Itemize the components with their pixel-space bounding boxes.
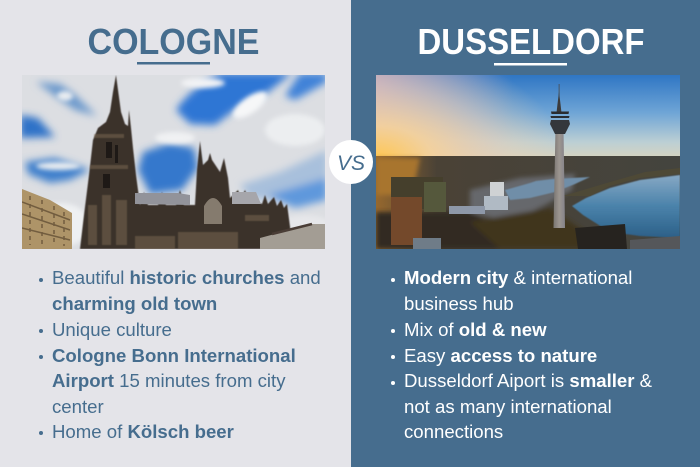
bullet list: dusseldorf: Mix of old & new (404, 319, 547, 340)
VS badge (329, 140, 373, 184)
panel: cologne (22, 28, 325, 249)
bullet list: dusseldorf: Modern city & international (404, 267, 632, 288)
bullet list: dusseldorf: Dusseldorf Aiport is smaller & (404, 370, 653, 391)
bullet list: cologne: Airport 15 minutes from city (52, 370, 286, 391)
bullet list: cologne (39, 267, 321, 442)
bullet list: cologne: Home of Kölsch beer (52, 421, 234, 442)
river (572, 175, 680, 238)
bullet list: dusseldorf: not as many international (404, 396, 612, 417)
buildings (391, 177, 443, 209)
bullet list: cologne: center (52, 396, 104, 417)
wall right (260, 224, 325, 249)
photo: dusseldorf rhine tower (376, 75, 680, 249)
bullet list: dusseldorf (391, 267, 653, 442)
tower (550, 84, 570, 228)
bullet list: cologne: Beautiful historic churches and (52, 267, 321, 288)
building left (22, 189, 72, 249)
VS badge: VS (337, 152, 365, 175)
peninsula (563, 168, 680, 196)
heading underline: cologne (137, 62, 210, 64)
bullet list: cologne: Cologne Bonn International (52, 345, 296, 366)
panel: dusseldorf (351, 0, 700, 467)
bullet list: cologne: charming old town (52, 293, 217, 314)
cathedral (80, 75, 291, 249)
bullet list: cologne: Unique culture (52, 319, 172, 340)
heading: dusseldorf: DUSSELDORF (418, 21, 644, 62)
photo: cologne cathedral (20, 73, 331, 249)
heading: cologne: COLOGNE (88, 21, 260, 62)
heading underline: dusseldorf (494, 63, 567, 66)
bullet list: dusseldorf: business hub (404, 293, 514, 314)
bullet list: dusseldorf: Easy access to nature (404, 345, 597, 366)
bullet list: dusseldorf: connections (404, 421, 503, 442)
